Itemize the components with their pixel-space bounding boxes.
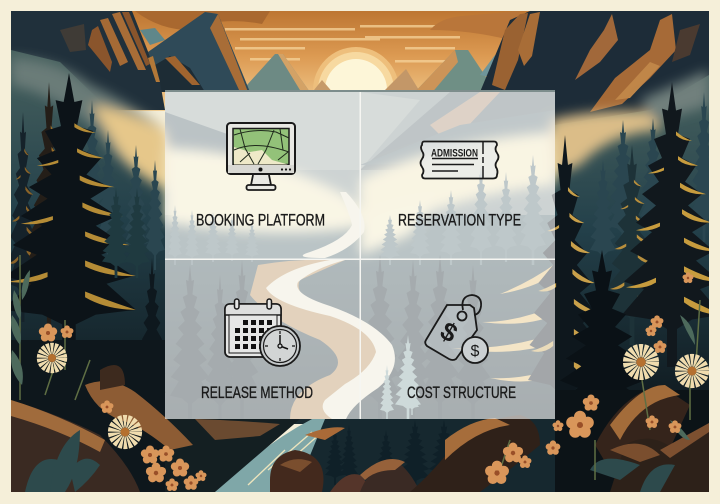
label: cost structure: COST STRUCTURE <box>407 384 516 402</box>
right forest backdrop <box>555 75 709 420</box>
dark foreground lower left and right <box>11 340 709 492</box>
faded trees behind panel <box>168 155 546 265</box>
icon: calendar with clock <box>225 299 300 366</box>
foreground teal trees <box>326 432 446 476</box>
left forest backdrop <box>11 50 165 340</box>
background forest silhouettes <box>80 92 718 270</box>
sky <box>124 11 530 111</box>
cell: release method <box>201 299 313 402</box>
label: release method: RELEASE METHOD <box>201 384 313 402</box>
icon: admission ticket: ADMISSION <box>431 148 478 160</box>
icon: monitor with map <box>227 123 295 190</box>
label: reservation type: RESERVATION TYPE <box>398 212 521 230</box>
right cliff <box>480 11 709 125</box>
sun <box>314 47 397 90</box>
cell: cost structure <box>407 295 516 402</box>
trees inside lower panel <box>380 335 421 420</box>
river and sand banks <box>215 192 395 492</box>
mist bands <box>11 58 709 255</box>
left cliff <box>11 11 165 110</box>
valley backdrop behind panel <box>165 90 555 424</box>
label: booking platform: BOOKING PLATFORM <box>196 212 325 230</box>
wildflowers <box>39 272 703 491</box>
translucent four-part panel <box>165 92 555 419</box>
icon: price tag and coin: $ <box>435 315 463 349</box>
boulders <box>11 365 709 492</box>
distant mountains <box>140 12 505 95</box>
gold fir branches behind lower panel <box>452 262 558 382</box>
cell: reservation type <box>398 142 521 230</box>
icon: price tag and coin <box>425 295 488 363</box>
foliage <box>11 255 700 492</box>
right large fir trees <box>528 82 709 404</box>
icon: price tag and coin: $ <box>471 343 480 360</box>
left large fir trees <box>11 73 166 393</box>
cell: booking platform <box>196 123 325 230</box>
panel dividers <box>165 92 555 419</box>
